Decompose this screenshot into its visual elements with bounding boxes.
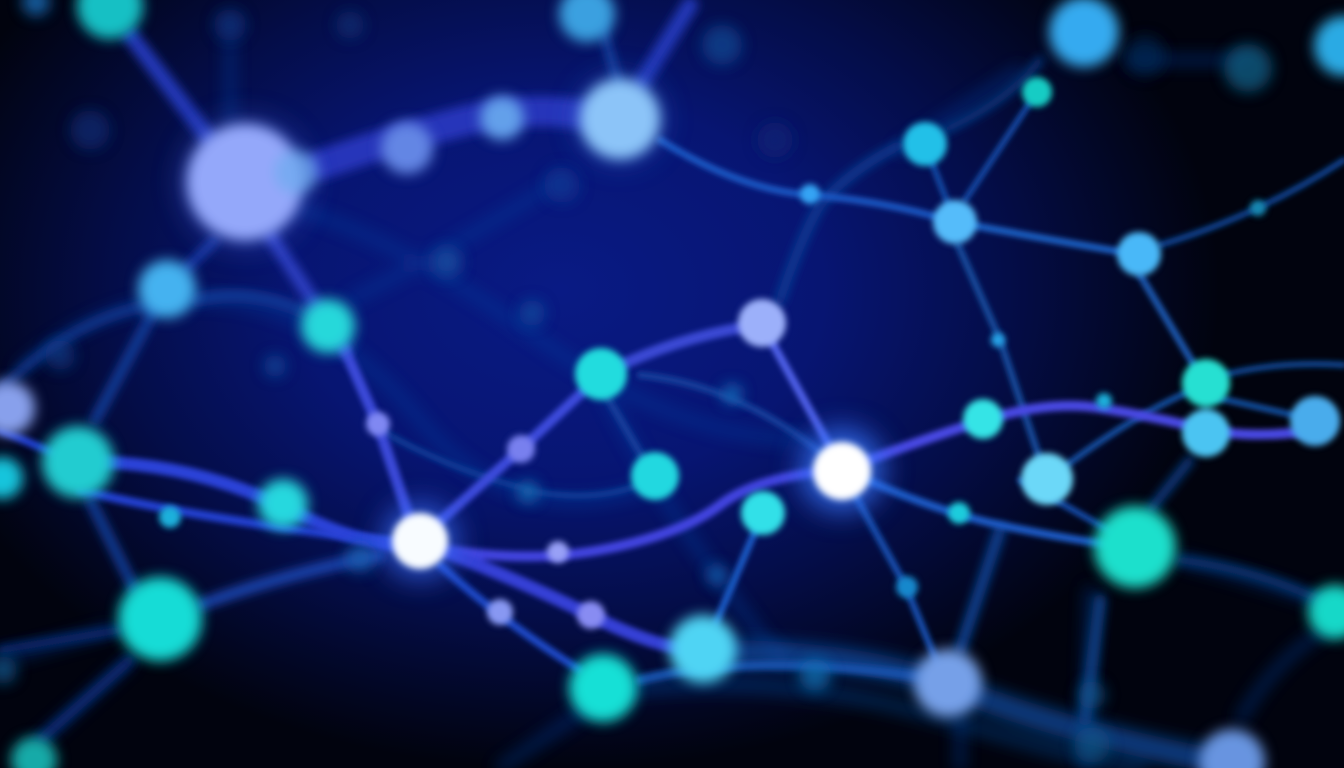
mid focus nodes [159, 77, 1340, 629]
icon: bright hub node left [392, 513, 448, 569]
icon: bright hub node right [813, 442, 871, 500]
sharp mid links [0, 95, 1344, 680]
bright main links [100, 325, 1315, 650]
wide lower ribbon [620, 652, 1210, 768]
glow halos [181, 75, 884, 579]
